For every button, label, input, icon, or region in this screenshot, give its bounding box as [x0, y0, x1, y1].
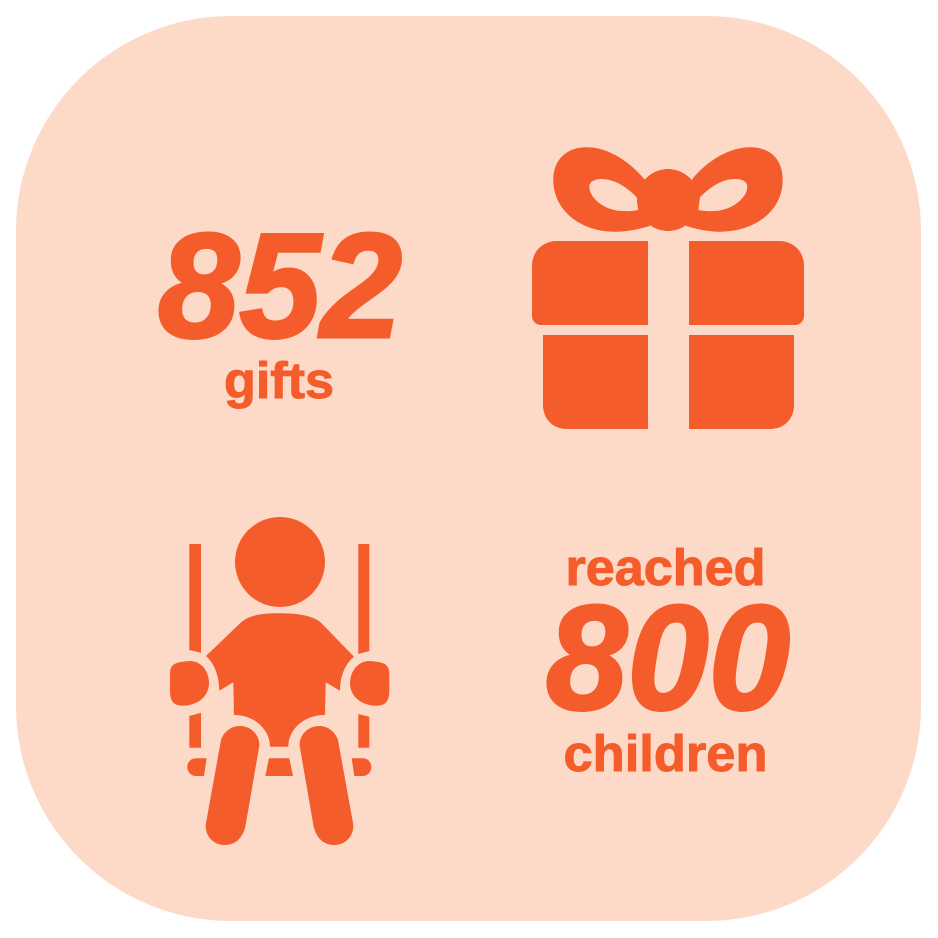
swing seat middle	[265, 758, 293, 776]
number: 800: 800	[546, 574, 790, 741]
right rope lower	[358, 714, 369, 748]
body	[206, 613, 354, 747]
icon: child on swing	[170, 517, 389, 845]
left rope upper	[189, 544, 201, 653]
icon: gift box	[532, 147, 804, 429]
right rope upper	[358, 544, 369, 654]
left rope lower	[189, 713, 201, 748]
box bottom right	[689, 335, 794, 429]
label: gifts: gifts	[224, 352, 334, 409]
label: children: children	[564, 725, 768, 782]
swing seat left	[187, 758, 207, 776]
swing seat right	[352, 758, 371, 776]
right leg	[300, 726, 353, 845]
stat: reached 800 children	[546, 539, 790, 782]
right hand	[350, 661, 389, 706]
head	[235, 517, 325, 607]
left leg	[206, 726, 259, 845]
label: reached: reached	[566, 539, 766, 596]
number: 852: 852	[158, 202, 402, 369]
box lid right	[689, 241, 804, 325]
left hand	[170, 661, 209, 706]
box lid left	[532, 241, 648, 325]
bow	[553, 147, 783, 232]
stat: 852 gifts	[158, 202, 402, 409]
box bottom left	[543, 335, 648, 429]
